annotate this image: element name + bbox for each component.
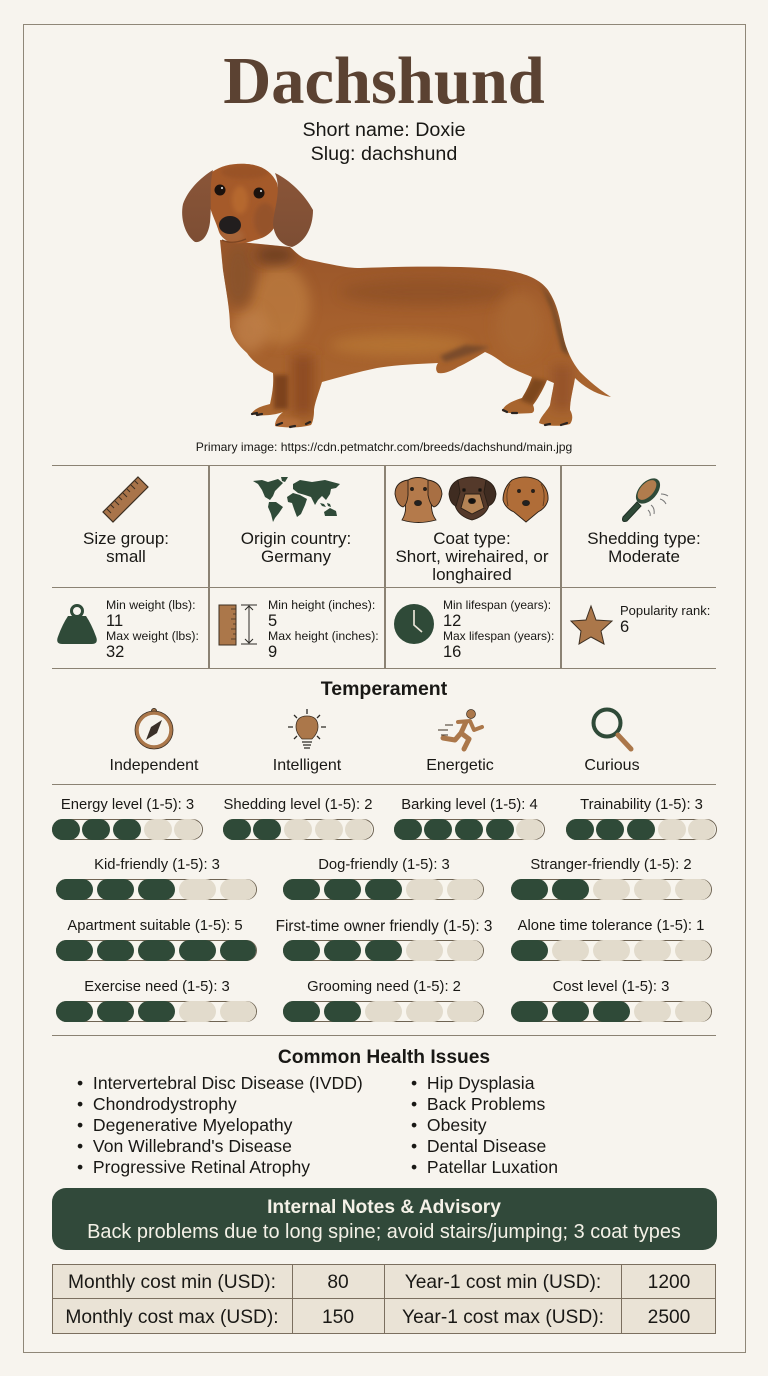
rating: stranger-friendly: Stranger-friendly (1-5): 2 [530,857,692,873]
cost table: Monthly cost max (USD): [65,1307,279,1328]
icon: star [570,604,614,645]
cost table: 150 [322,1307,354,1328]
height text: 5 [268,612,277,630]
bar: exercise [56,1001,257,1022]
cost table [52,1264,716,1334]
rating: dog-friendly: Dog-friendly (1-5): 3 [318,857,450,873]
weight text: Max weight (lbs): [106,629,199,643]
shedding type text: Moderate [608,547,680,566]
rating: cost: Cost level (1-5): 3 [553,979,669,995]
health divider [52,1035,716,1036]
health list left: • Chondrodystrophy [77,1094,237,1114]
cost table: Monthly cost min (USD): [68,1272,276,1293]
rating: barking level: Barking level (1-5): 4 [401,797,538,813]
advisory banner [52,1188,717,1250]
head [209,164,279,243]
coat type text: Coat type: [433,529,511,548]
bar: stranger [511,879,712,900]
popularity text: 6 [620,618,629,636]
coat type text: Short, wirehaired, or [395,547,549,566]
eyes and nose [214,184,226,196]
bar: grooming [283,1001,484,1022]
short name: Short name: Doxie [302,119,466,141]
bar: energy [52,819,203,840]
title: Dachshund [223,45,545,118]
icon: world map [253,477,340,522]
advisory title: Internal Notes & Advisory [267,1197,501,1218]
health list right: • Patellar Luxation [411,1157,558,1177]
height text: Min height (inches): [268,598,375,612]
icon: three coat faces [394,476,549,523]
weight text: 32 [106,643,124,661]
health list right: • Dental Disease [411,1136,546,1156]
lifespan text: 16 [443,643,461,661]
temperament divider [52,784,716,785]
shedding type text: Shedding type: [587,529,701,548]
rating: exercise: Exercise need (1-5): 3 [84,979,230,995]
shedding type text [587,529,701,566]
bar: cost [511,1001,712,1022]
bar: kid [56,879,257,900]
coat type text: longhaired [432,565,512,584]
height text [268,598,379,661]
rating: first-time owner: First-time owner friendly (1-5): 3 [276,918,492,935]
lifespan text: 12 [443,612,461,630]
rating: grooming: Grooming need (1-5): 2 [307,979,461,995]
cost table: Year-1 cost max (USD): [402,1307,604,1328]
health list left: • Progressive Retinal Atrophy [77,1157,310,1177]
popularity text [620,603,710,636]
health heading: Common Health Issues [278,1047,490,1068]
size group text: small [106,547,146,566]
health list right: • Hip Dysplasia [411,1073,534,1093]
icon: runner [438,709,484,752]
health list left: • Degenerative Myelopathy [77,1115,292,1135]
cost table: 1200 [648,1272,690,1293]
bar: dog [283,879,484,900]
lifespan text [443,598,554,661]
cost table: Year-1 cost min (USD): [405,1272,601,1293]
origin text: Germany [261,547,331,566]
icon: compass [134,708,174,750]
body [220,240,611,427]
rating: kid-friendly: Kid-friendly (1-5): 3 [94,857,220,873]
size group text: Size group: [83,529,169,548]
health list left [77,1073,363,1177]
health list left: • Intervertebral Disc Disease (IVDD) [77,1073,363,1093]
icon: magnifier [592,708,634,752]
icon: weight [57,604,97,644]
bar: shedding [223,819,374,840]
bar: first-time owner [283,940,484,961]
popularity text: Popularity rank: [620,603,710,618]
bar: trainability [566,819,717,840]
icon: light bulb [288,709,326,749]
curious label: Curious [584,757,640,774]
coat type text [395,529,549,584]
icon: clock [394,604,434,644]
primary image caption: Primary image: https://cdn.petmatchr.com/breeds/dachshund/main.jpg [196,440,572,454]
dog photo illustration [182,164,611,428]
rating: energy level: Energy level (1-5): 3 [61,797,194,813]
energetic label: Energetic [426,757,494,774]
origin text: Origin country: [241,529,351,548]
health list right: • Obesity [411,1115,487,1135]
health list right [411,1073,558,1177]
health list right: • Back Problems [411,1094,545,1114]
weight text [106,598,199,661]
weight text: 11 [106,612,123,630]
intelligent label: Intelligent [273,757,341,774]
slug: Slug: dachshund [311,143,457,165]
icon: ruler [102,476,149,523]
bar: apartment [56,940,257,961]
temperament heading: Temperament [321,678,447,700]
rating: trainability: Trainability (1-5): 3 [580,797,703,813]
size group text [83,529,169,566]
rating: apartment: Apartment suitable (1-5): 5 [67,918,243,934]
advisory text: Back problems due to long spine; avoid stairs/jumping; 3 coat types [87,1221,681,1243]
icon: brush [622,478,668,522]
height text: Max height (inches): [268,629,379,643]
stats grid lines [52,465,716,1016]
icon: height ruler [218,604,257,646]
origin text [241,529,351,566]
rating: shedding level: Shedding level (1-5): 2 [224,797,372,813]
rating: alone time: Alone time tolerance (1-5): 1 [518,918,704,934]
bar: barking [394,819,545,840]
health list left: • Von Willebrand's Disease [77,1136,292,1156]
lifespan text: Max lifespan (years): [443,629,554,643]
cost table: 80 [327,1272,349,1293]
ears [182,170,213,242]
cost table: 2500 [648,1307,690,1328]
independent label: Independent [110,757,198,774]
lifespan text: Min lifespan (years): [443,598,551,612]
bar: alone time [511,940,712,961]
weight text: Min weight (lbs): [106,598,196,612]
height text: 9 [268,643,277,661]
